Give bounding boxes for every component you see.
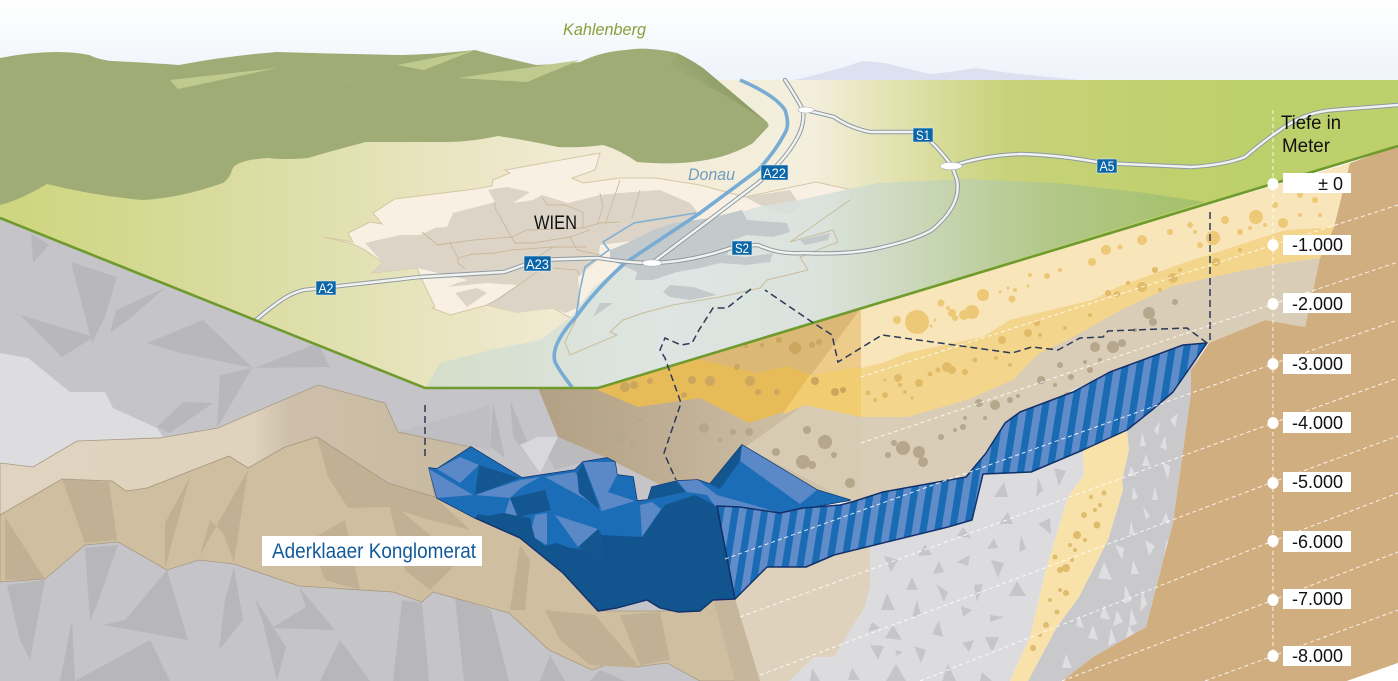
white bottom-right corner (1347, 663, 1398, 681)
lighter diagonal zone (800, 308, 861, 390)
hill highlights (170, 50, 580, 90)
light grey rock with triangles (789, 450, 1084, 681)
city lower-left patch (455, 288, 487, 307)
mid yellow band (861, 227, 1334, 417)
underground rock: left grey base (0, 210, 800, 681)
scale label values: -7.000 (1292, 589, 1343, 609)
scale title: Meter (1282, 136, 1331, 157)
grey rock facets (20, 233, 607, 473)
scale label values (1292, 174, 1343, 666)
road centre line (256, 80, 1398, 320)
road sign A2: A2 (318, 280, 334, 296)
ground plane surface (0, 80, 1398, 388)
lighter diagonal mid zone (782, 367, 861, 417)
light yellow band (861, 163, 1350, 368)
brown rock on right side (1062, 146, 1398, 681)
boundary dashed outline (425, 212, 1210, 480)
east city outline on overlay (565, 200, 850, 355)
hill ridge shading (665, 53, 767, 122)
hill: Kahlenberg forest (0, 49, 768, 205)
city district lines (422, 180, 640, 305)
callout: Aderklaaer Konglomerat (262, 536, 482, 566)
scale label values: -6.000 (1292, 532, 1343, 552)
shaded upper yellow (598, 308, 861, 388)
east city built-up patches (593, 210, 830, 317)
light facets (429, 445, 817, 547)
road sign A23: A23 (526, 256, 549, 272)
sediment dots: light yellow band (893, 187, 1333, 334)
scale label boxes (1283, 173, 1351, 666)
dark facets (475, 445, 742, 563)
mid grey rock strip (1028, 343, 1207, 681)
map label: WIEN: WIEN (534, 213, 577, 234)
translucent beige patch on brown (1170, 258, 1320, 343)
beige sediment layer under yellow bands (538, 258, 1320, 505)
sediment dots: shaded yellow (620, 317, 846, 398)
light grey rock highlights (520, 437, 558, 473)
beige rock below the blue layer (735, 545, 870, 681)
sediment dots: beige layer (569, 299, 1194, 488)
scale label values: -2.000 (1292, 294, 1343, 314)
scale label values: -4.000 (1292, 413, 1343, 433)
east city lobe (745, 190, 800, 215)
yellow sediment strip (1010, 430, 1129, 681)
Danube branch (576, 213, 696, 317)
scale label values: -1.000 (1292, 235, 1343, 255)
depth guide lines (725, 110, 1398, 681)
grey-green terrain overlay (426, 179, 1204, 388)
striped part of the layer (717, 343, 1207, 599)
sky (0, 0, 1398, 82)
scale title: Tiefe in (1281, 113, 1341, 134)
dark body (429, 445, 850, 612)
scale dots (1268, 178, 1278, 662)
sediment dots: yellow strip (1030, 490, 1106, 651)
interchanges (642, 107, 962, 266)
shaded beige section (538, 300, 861, 515)
road sign S2: S2 (735, 240, 749, 256)
road sign S1: S1 (916, 127, 930, 143)
tan rock layer facets (5, 437, 670, 668)
green surface edge line (0, 146, 1398, 388)
triangles: light grey rock (810, 468, 1066, 681)
light grey rock patch (0, 353, 163, 467)
scale label values: -3.000 (1292, 354, 1343, 374)
tan strip below blue body (713, 599, 760, 681)
Danube river (554, 80, 788, 387)
shaded mid yellow (593, 358, 861, 423)
map label: Donau: Donau (688, 165, 735, 184)
blue conglomerate: Aderklaaer Konglomerat (429, 343, 1207, 612)
distant mountains (790, 61, 1100, 81)
city built-up area (365, 187, 700, 313)
tan rock layer (upper) (0, 385, 471, 515)
tan rock layer (lower) (0, 437, 760, 681)
lower grey rock facets (7, 545, 625, 681)
scale label values: ± 0 (1318, 174, 1343, 194)
scale label values: -8.000 (1292, 646, 1343, 666)
depth scale (1268, 113, 1351, 666)
road sign A22: A22 (763, 165, 786, 181)
sediment dots: mid yellow band (866, 248, 1242, 402)
road casing (256, 80, 1398, 320)
triangles: mid grey rock (1062, 413, 1178, 668)
upper medium-blue body (429, 445, 850, 563)
scale label values: -5.000 (1292, 472, 1343, 492)
callout: Aderklaaer Konglomerat: Aderklaaer Konglomerat (272, 540, 476, 563)
motorway network (256, 80, 1398, 320)
map label: Kahlenberg: Kahlenberg (563, 20, 647, 39)
road sign A5: A5 (1100, 158, 1115, 174)
lighter beige section right of diagonal (745, 403, 861, 515)
Wien city area (324, 153, 852, 355)
